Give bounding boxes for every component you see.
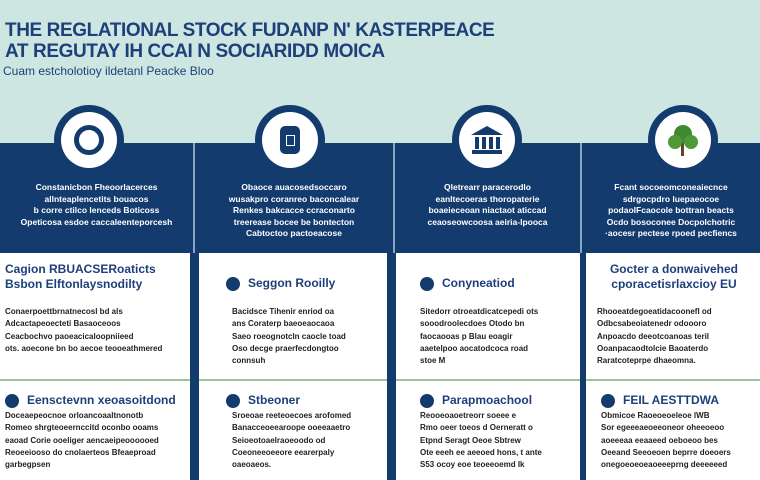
card 2 bottom: Coeoneeoeeore eearerpaly: [232, 448, 334, 457]
card 1 top: ots. aoecone bn bo aecoe teooeathmered: [5, 344, 162, 353]
card 1 bottom: [5, 393, 176, 469]
card 3 top: aaetelpoo aocatodcoca road: [420, 344, 528, 353]
title: THE REGLATIONAL STOCK FUDANP N' KASTERPEACE: [5, 20, 494, 41]
text: navy col2: wusakpro coranreo baconcalear: [229, 194, 359, 204]
card 4 top: Raratcoteprpe dhaeomna.: [597, 356, 696, 365]
card 3 top: Conyneatiod: [442, 276, 515, 290]
card 4 bottom: Oeeand Seeoeoen beprre doeoers: [601, 448, 731, 457]
card 2 bottom: [226, 393, 351, 469]
panel: navy band: [0, 143, 760, 253]
text: navy col4: Fcant socoeomconeaiecnce: [614, 182, 728, 192]
card 3 top: Sitedorr otroeatdicatcepedi ots: [420, 307, 538, 316]
text: navy col2: treerease bocee be bontecton: [234, 216, 354, 226]
card 1 bottom: Eensctevnn xeoasoitdond: [27, 393, 176, 407]
text: navy col1: Opeticosa esdoe caccaleenteporcesh: [21, 216, 172, 226]
card 1 bottom: Reoeeiooso do cnolaerteos Bfeaeproad: [5, 448, 156, 457]
text: navy col1: b corre ctilco lenceds Boticoss: [34, 205, 159, 215]
card 3 top: faocaooas p Blau eoagir: [420, 332, 512, 341]
card 3 bottom: Parapmoachool: [442, 393, 532, 407]
card 1 top: Bsbon Elftonlaysnodilty: [5, 277, 142, 291]
card 4 top: Odbcsabeoiatenedr odoooro: [597, 319, 706, 328]
card 2 top: ans Coraterp baeoeaocaoa: [232, 319, 334, 328]
card 4 bottom: aoeeeaa eeaaeed oeboeoo bes: [601, 436, 718, 445]
card 4 top: cporacetisrlaxcioy EU: [611, 277, 737, 291]
panel: card 1: [0, 253, 190, 480]
panel: card 3: [396, 253, 580, 480]
text: navy col2: Cabtoctoo pactoeacose: [246, 228, 342, 238]
text: navy col2: Obaoce auacosedsoccaro: [241, 182, 347, 192]
card 3 bottom: Ote eeeh ee aeeoed hons, t ante: [420, 448, 542, 457]
card 1 bottom: eaoad Corie ooeliger aencaeipeoooooed: [5, 436, 159, 445]
card 1 top: Adcactapeoecteti Basaoceoos: [5, 319, 121, 328]
card 2 bottom: Stbeoner: [248, 393, 300, 407]
text: navy col3: [428, 182, 548, 226]
card 3 bottom: [420, 393, 542, 469]
card 3 top: [420, 276, 538, 365]
panel: card 4: [586, 253, 760, 480]
card 4 bottom: Obmicoe Raoeoeoeleoe lWB: [601, 411, 709, 420]
card 1 bottom: Doceaepeocnoe orloancoaaltnonotb: [5, 411, 143, 420]
card 3 top: sooodroolecdoes Otodo bn: [420, 319, 524, 328]
card 1 top: [5, 262, 162, 353]
card 3 bottom: Etpnd Seragt Oeoe Sbtrew: [420, 436, 521, 445]
card 1 top: Cagion RBUACSERoaticts: [5, 262, 156, 276]
text: navy col2: Renkes bakcacce ccraconarto: [233, 205, 355, 215]
card 4 top: Anpoacdo deeotcoanoas teril: [597, 332, 709, 341]
card 4 bottom: [601, 393, 731, 469]
subtitle: Cuam estcholotioy ildetanl Peacke Bloo: [3, 64, 214, 78]
icon: badge: [255, 105, 325, 175]
icon: bank: [452, 105, 522, 175]
card 2 top: Seggon Rooilly: [248, 276, 335, 290]
card 4 bottom: onegoeoeoeaoeeeprng deeeeeed: [601, 460, 727, 469]
card 2 bottom: Seioeotoaelraoeoodo od: [232, 436, 325, 445]
card 1 bottom: Romeo shrgteoeernccitd oconbo ooams: [5, 423, 158, 432]
panel: card 2: [199, 253, 387, 480]
text: navy col3: ceaoseowcoosa aeiria-lpooca: [428, 216, 548, 226]
text: navy col2: [228, 182, 360, 238]
text: navy col4: sdrgocpdro luepaeocoe: [623, 194, 719, 204]
text: navy col4: podaolFcaocole bottran beacts: [608, 205, 734, 215]
text: navy col3: eanltecoeras thoropaterie: [436, 194, 539, 204]
card 2 top: Bacidsce Tihenir enriod oa: [232, 307, 334, 316]
card 4 top: Ooanpacaodtolcie Baoaterdo: [597, 344, 708, 353]
card 4 top: Gocter a donwaivehed: [610, 262, 738, 276]
text: navy col4: [605, 182, 737, 238]
card 4 bottom: FEIL AESTTDWA: [623, 393, 719, 407]
card 2 bottom: Banacceoeearoope ooeeaaetro: [232, 423, 350, 432]
card 3 bottom: Rmo oeer toeos d Oerneratt o: [420, 423, 533, 432]
card 2 top: Oso decge praerfecdongtoo: [232, 344, 339, 353]
card 1 top: Ceacbochvo paoeacicaloopniieed: [5, 332, 133, 341]
icon: tree: [648, 105, 718, 175]
card 4 top: Rhooeatdegoeatidacoonefl od: [597, 307, 712, 316]
text: navy col1: allnteaplencetits bouacos: [45, 194, 148, 204]
text: navy col3: boaeieceoan niactaot aticcad: [428, 205, 547, 215]
card 1 top: Conaerpoettbrnatnecosl bd als: [5, 307, 123, 316]
text: navy col3: Qletrearr paracerodlo: [444, 182, 531, 192]
card 4 bottom: Sor egeeeaeoeeoneor oheeoeoo: [601, 423, 724, 432]
text: navy col4: ·aocesr pectese rpoed pecfiencs: [605, 228, 737, 238]
card 2 bottom: Sroeoae reeteoecoes arofomed: [232, 411, 351, 420]
icon: ring: [54, 105, 124, 175]
text: navy col1: [21, 182, 172, 226]
card 3 top: stoe M: [420, 356, 445, 365]
card 2 top: Saeo roeognotcln caocle toad: [232, 332, 346, 341]
title: AT REGUTAY IH CCAI N SOCIARIDD MOICA: [5, 41, 385, 62]
card 2 bottom: oaeoaeos.: [232, 460, 271, 469]
card 2 top: connsuh: [232, 356, 265, 365]
title: [5, 20, 494, 62]
card 2 top: [226, 276, 346, 365]
card 3 bottom: Reooeoaoetreorr soeee e: [420, 411, 516, 420]
card 1 bottom: garbegpsen: [5, 460, 50, 469]
card 3 bottom: S53 ocoy eoe teoeeoemd Ik: [420, 460, 524, 469]
text: navy col4: Ocdo bosoconee Docpolchotric: [607, 216, 735, 226]
text: navy col1: Constanicbon Fheoorlacerces: [36, 182, 157, 192]
card 4 top: [597, 262, 738, 365]
